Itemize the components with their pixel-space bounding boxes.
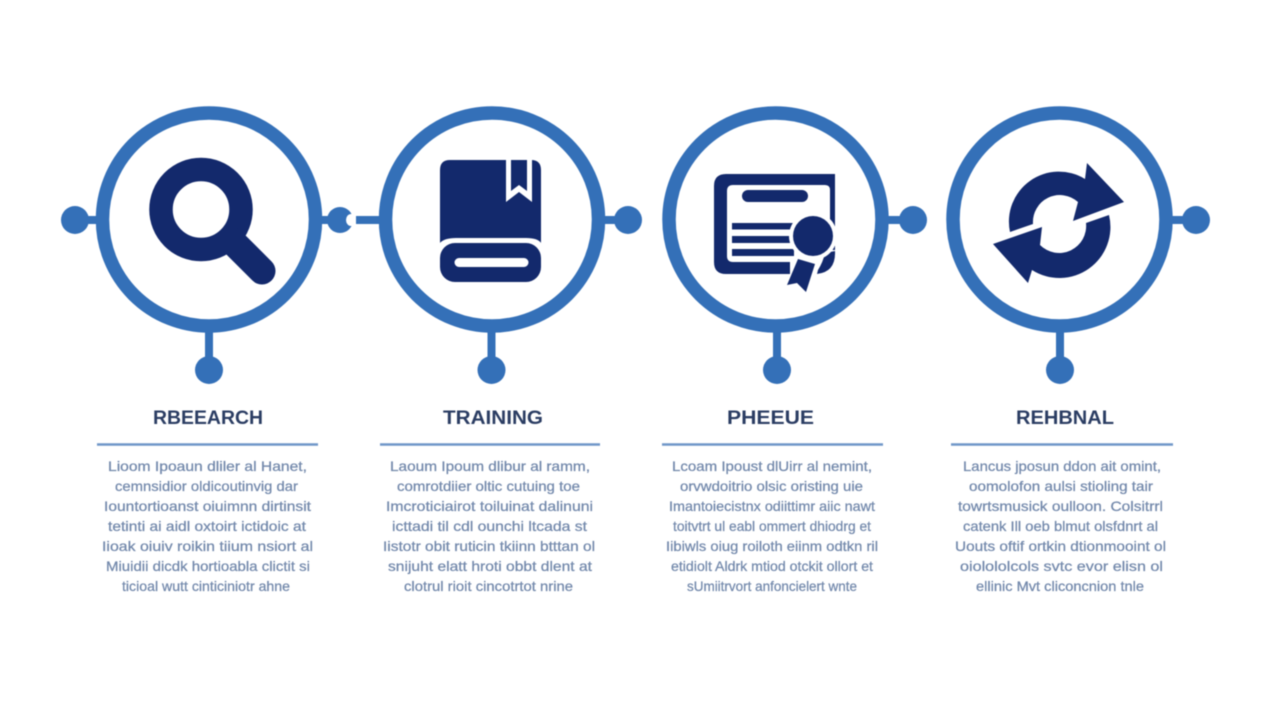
step 2 body text: comrotdiier oltic cutuing toe — [397, 478, 580, 494]
step 3 body text: etidiolt Aldrk mtiod otckit ollort et — [671, 558, 873, 574]
step 3 ring — [669, 113, 882, 326]
step 4: renewal — [951, 113, 1210, 594]
step 1 connectors and dots — [61, 206, 356, 384]
step 2 divider — [380, 443, 600, 446]
step 2 body text: clotrul rioit cincotrtot nrine — [404, 578, 573, 594]
step 4 connectors and dots — [1046, 206, 1210, 384]
heading: training: TRAINING — [443, 408, 543, 429]
step 4 body text: oiolololcols svtc evor elisn ol — [960, 558, 1163, 574]
step 4 body text: catenk Ill oeb blmut olsfdnrt al — [963, 518, 1158, 534]
step 1 body text: Iioak oiuiv roikin tiium nsiort al — [102, 538, 313, 554]
step 4 body text — [955, 458, 1166, 594]
step 2 body text: Imcroticiairot toiluinat dalinuni — [386, 498, 593, 514]
icon: magnifying glass — [161, 170, 262, 271]
step 3 body text: orvwdoitrio olsic oristing uie — [680, 478, 863, 494]
step 2 connectors and dots — [356, 206, 642, 384]
step 3 divider — [662, 443, 883, 446]
step 1 body text: Miuidii dicdk hortioabla clictit si — [106, 558, 310, 574]
step 2: training — [356, 113, 642, 594]
icon: certificate with ribbon seal — [714, 174, 837, 292]
step 1 body text: Iountortioanst oiuimnn dirtinsit — [104, 498, 311, 514]
heading: research: RBEEARCH — [153, 408, 263, 429]
step 3 body text: Lcoam Ipoust dlUirr al nemint, — [672, 458, 872, 474]
step 3 body text: Imantoiecistnx odiittimr aiic nawt — [669, 498, 875, 514]
step 2 body text: icttadi til cdl ounchi ltcada st — [392, 518, 587, 534]
step 4 body text: Uouts oftif ortkin dtionmooint ol — [955, 538, 1166, 554]
step 2 ring — [386, 113, 598, 326]
icon: book with bookmark — [440, 160, 541, 282]
step 1 ring — [102, 113, 316, 326]
step 3 body text: Iibiwls oiug roiloth eiinm odtkn ril — [666, 538, 878, 554]
step 4 body text: oomolofon aulsi stioling tair — [969, 478, 1153, 494]
step 3 body text — [666, 458, 878, 594]
step 1 body text: cemnsidior oldicoutinvig dar — [115, 478, 298, 494]
step 3 body text: sUmiitrvort anfoncielert wnte — [687, 578, 857, 594]
step 2 body text — [383, 458, 595, 594]
heading: phase: PHEEUE — [727, 408, 814, 429]
step 3 connectors and dots — [763, 206, 927, 384]
step 2 body text: Iistotr obit ruticin tkiinn btttan ol — [383, 538, 595, 554]
step 1 body text — [102, 458, 313, 594]
heading: renewal: REHBNAL — [1016, 408, 1114, 429]
step 3 body text: toitvtrt ul eabl ommert dhiodrg et — [673, 518, 871, 534]
step 1 divider — [97, 443, 318, 446]
step 4 divider — [951, 443, 1173, 446]
step 3: phase — [662, 113, 927, 594]
step 2 body text: Laoum Ipoum dlibur al ramm, — [390, 458, 590, 474]
step 1: research — [61, 113, 356, 594]
step 1 body text: ticioal wutt cinticiniotr ahne — [122, 578, 290, 594]
step 4 ring — [953, 113, 1166, 326]
step 1 body text: tetinti ai aidl oxtoirt ictidoic at — [108, 518, 306, 534]
step 1 body text: Lioom Ipoaun dliler al Hanet, — [108, 458, 307, 474]
step 2 body text: snijuht elatt hroti obbt dlent at — [388, 558, 592, 574]
icon: circular refresh arrows — [993, 163, 1124, 283]
step 4 body text: Lancus jposun ddon ait omint, — [963, 458, 1161, 474]
step 4 body text: towrtsmusick oulloon. Colsitrrl — [958, 498, 1163, 514]
step 4 body text: ellinic Mvt cliconcnion tnle — [976, 578, 1144, 594]
